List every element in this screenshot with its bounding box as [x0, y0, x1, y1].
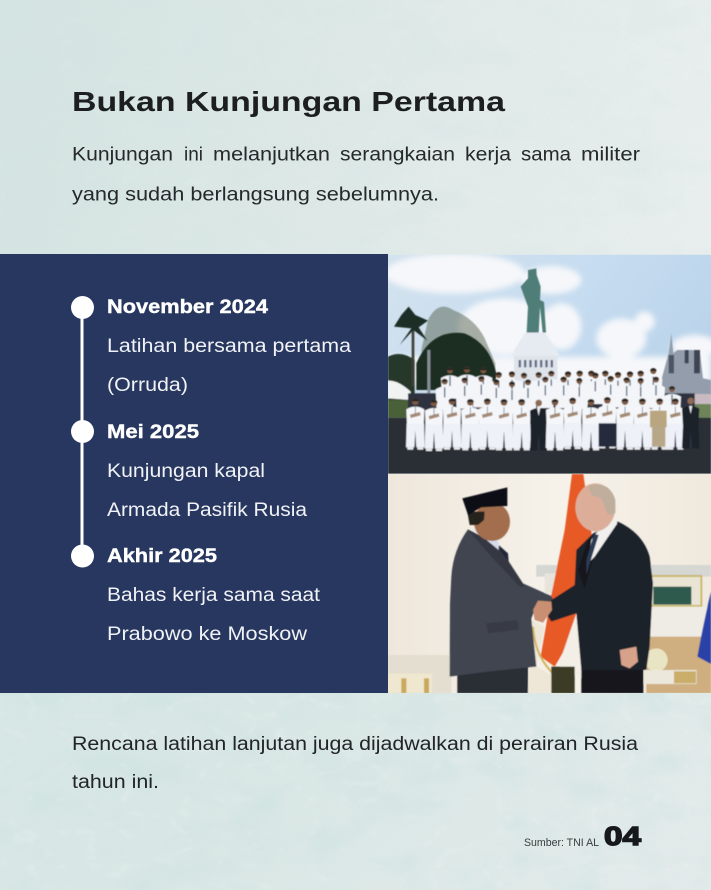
back row [441, 367, 459, 399]
intro paragraph: Kunjungan [72, 144, 173, 166]
event: November 2024 [107, 297, 351, 396]
event: November 2024: Latihan bersama pertama [107, 336, 351, 357]
hands [533, 601, 552, 623]
road [388, 418, 711, 474]
intro paragraph [72, 144, 641, 206]
timeline line and markers [71, 296, 94, 568]
closing paragraph: Rencana latihan lanjutan juga dijadwalkan di perairan Rusia [72, 734, 638, 755]
event: Akhir 2025: Bahas kerja sama saat [107, 585, 321, 606]
event: Mei 2025 [107, 422, 307, 521]
head right [575, 483, 615, 531]
page number: 04 [604, 821, 642, 851]
event: November 2024: (Orruda) [107, 375, 188, 396]
shadow behind group [408, 393, 695, 447]
photo: naval officers group in front of statue [385, 253, 711, 474]
event: Akhir 2025 [107, 546, 321, 645]
intro paragraph: yang sudah berlangsung sebelumnya. [72, 184, 439, 206]
flowers and table [645, 648, 668, 672]
man right: black suit [581, 667, 643, 693]
flag [541, 474, 592, 667]
ship [661, 333, 711, 397]
photo: handshake of two leaders [388, 474, 711, 693]
source note: Sumber: TNI AL [524, 837, 599, 849]
panel: timeline [0, 254, 388, 693]
fireplace and room detail [536, 565, 711, 577]
front row [406, 398, 425, 450]
title: Bukan Kunjungan Pertama [72, 86, 506, 117]
event: Mei 2025: Kunjungan kapal [107, 461, 265, 482]
intro paragraph: serangkaian [340, 144, 455, 166]
trees [388, 353, 416, 401]
event: Akhir 2025: Akhir 2025 [107, 546, 217, 567]
event: Akhir 2025: Prabowo ke Moskow [107, 624, 307, 645]
intro paragraph: sama [521, 144, 571, 166]
middle row [436, 379, 454, 410]
event: Mei 2025: Mei 2025 [107, 422, 199, 443]
man left: dark grey suit [457, 667, 528, 693]
head left [474, 502, 510, 541]
closing paragraph: tahun ini. [72, 772, 159, 793]
intro paragraph: melanjutkan [213, 144, 330, 166]
event: November 2024: November 2024 [107, 297, 268, 318]
closing paragraph [72, 734, 638, 793]
statue [521, 268, 546, 333]
intro paragraph: militer [581, 144, 641, 166]
event: Mei 2025: Armada Pasifik Rusia [107, 500, 307, 521]
dome [512, 333, 559, 356]
intro paragraph: ini [184, 144, 203, 166]
intro paragraph: kerja [465, 144, 511, 166]
